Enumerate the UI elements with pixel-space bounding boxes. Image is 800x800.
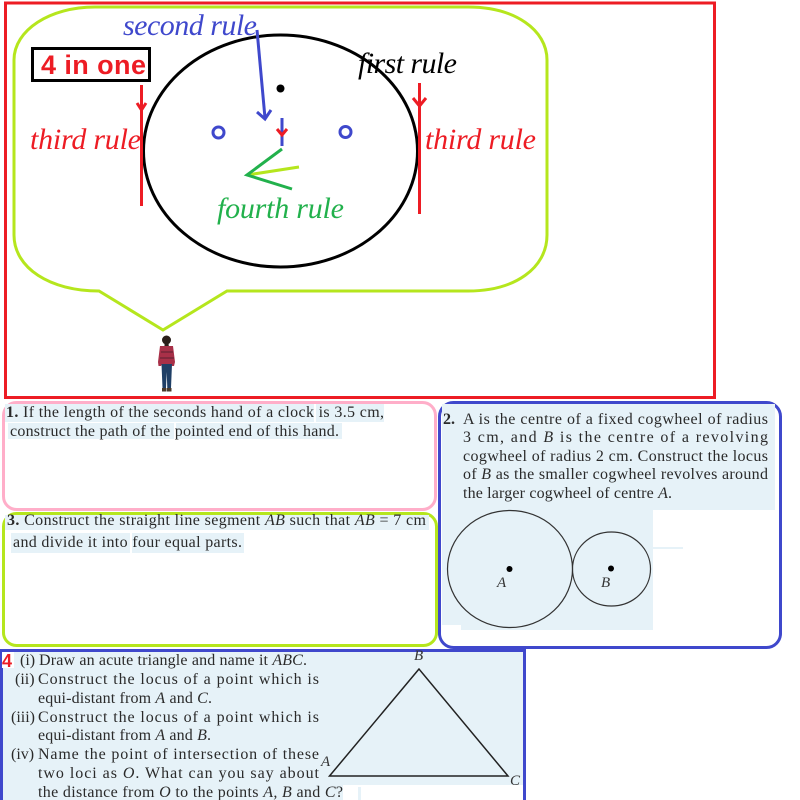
- label: second rule: second rule: [123, 9, 257, 42]
- line: third rule left: [137, 85, 146, 206]
- title: 4 in one: 4 in one: [41, 50, 146, 80]
- diagram: cogwheels: B: [601, 575, 610, 591]
- text: question 3: 3. Construct the straight line segment AB such that AB = 7 cm: [7, 512, 427, 529]
- arrow: second rule: [257, 30, 271, 119]
- text: question 2: 2.: [443, 411, 455, 428]
- text: question 2: [443, 411, 768, 502]
- angle: fourth rule: [247, 149, 299, 189]
- diagram: triangle ABC: C: [510, 773, 521, 789]
- panel: question 3: [4, 512, 436, 646]
- label: third rule right: third rule: [425, 123, 536, 156]
- figure: standing person: [158, 336, 175, 392]
- text: question 2: of B as the smaller cogwheel revolves around: [463, 466, 768, 483]
- text: question 4: two loci as O. What can you say about: [38, 765, 320, 782]
- number: 4: 4: [2, 651, 12, 671]
- blue points: [213, 126, 351, 138]
- text: question 4: (i): [20, 652, 35, 669]
- arrow: small centre arrow: [277, 118, 287, 146]
- diagram: triangle ABC: [320, 648, 521, 789]
- text: question 4: (ii): [15, 671, 35, 688]
- label: first rule: first rule: [358, 47, 457, 80]
- panel: question 2: [440, 402, 780, 648]
- line: third rule right: [413, 83, 426, 214]
- text: question 4: equi-distant from A and B.: [38, 727, 211, 744]
- text: question 1: 1. If the length of the seconds hand of a clock is 3.5 cm,: [6, 404, 384, 421]
- text: question 2: A is the centre of a fixed cogwheel of radius: [463, 411, 768, 428]
- text: question 4: [11, 652, 343, 800]
- text: question 4: Construct the locus of a point which is: [38, 709, 319, 726]
- panel: question 1: construct the path of the pointed end of this hand.: [10, 423, 339, 440]
- diagram: triangle ABC: A: [320, 754, 331, 770]
- diagram: cogwheels: [448, 510, 650, 628]
- text: question 2: the larger cogwheel of centre A.: [463, 485, 672, 502]
- centre dot: [276, 84, 284, 92]
- text: question 2: 3 cm, and B is the centre of a revolving: [463, 429, 768, 446]
- circle: first rule locus: [144, 35, 418, 267]
- text: question 4: Draw an acute triangle and name it ABC.: [39, 652, 307, 669]
- text: question 4: (iii): [11, 709, 35, 726]
- label: third rule left: third rule: [30, 123, 141, 156]
- panel: question 4: [2, 648, 524, 800]
- panel: 4 in one concept frame: [6, 3, 714, 398]
- text: question 4: Construct the locus of a point which is: [38, 671, 319, 688]
- panel: question 1: [4, 402, 436, 510]
- panel: question 3: and divide it into four equal parts.: [13, 534, 242, 551]
- speech bubble: [14, 7, 547, 330]
- text: question 2: cogwheel of radius 2 cm. Construct the locus: [463, 448, 768, 465]
- text: question 4: (iv): [11, 746, 34, 763]
- diagram: triangle ABC: B: [414, 648, 423, 664]
- text: question 4: equi-distant from A and C.: [38, 690, 212, 707]
- diagram: cogwheels: A: [496, 575, 507, 591]
- text: question 4: Name the point of intersection of these: [38, 746, 319, 763]
- label: fourth rule: fourth rule: [217, 192, 344, 225]
